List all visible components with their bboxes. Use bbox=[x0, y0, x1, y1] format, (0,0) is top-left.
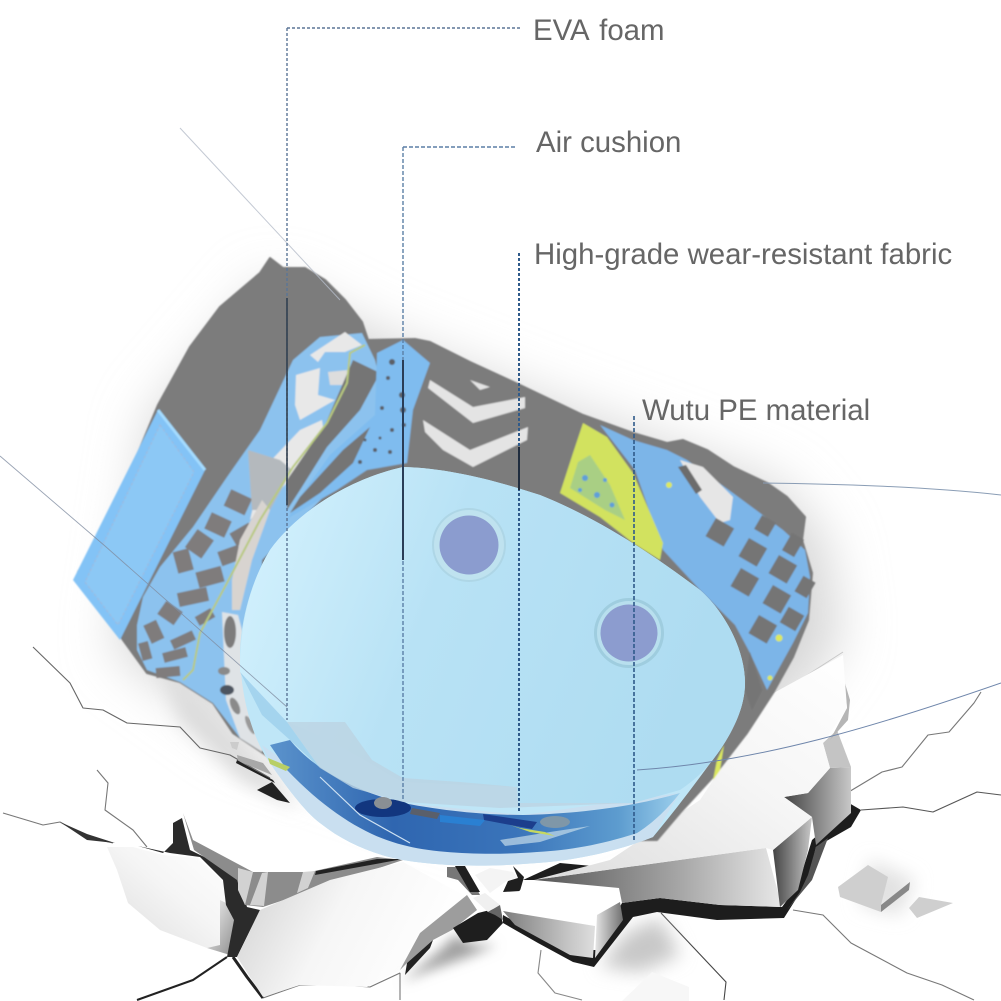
small rock chip 2 bbox=[909, 897, 953, 918]
pad outer rim bbox=[240, 467, 745, 866]
right slab top bbox=[534, 655, 847, 880]
dark inner flaps bbox=[287, 360, 380, 510]
leader line: right lower curve bbox=[637, 683, 1001, 770]
callout: air cushion: Air cushion bbox=[536, 126, 681, 159]
left slab bbox=[107, 847, 228, 948]
speckles on splash bbox=[358, 359, 406, 464]
green stitch line bbox=[183, 345, 365, 680]
scalloped trim chain bbox=[218, 612, 268, 752]
white logo patch bbox=[678, 460, 733, 523]
right slab front face bbox=[534, 848, 782, 907]
grey flap lower bbox=[290, 427, 370, 513]
velcro patch bbox=[73, 410, 205, 640]
lower white slab bbox=[503, 882, 623, 958]
soft shadow under lower slab bbox=[600, 918, 680, 972]
central slab bbox=[237, 862, 467, 997]
pad rivet upper bbox=[432, 508, 506, 582]
strap and shell base bbox=[78, 258, 812, 840]
callout: EVA foam: EVA foam bbox=[533, 14, 665, 47]
pad lower rim bbox=[262, 745, 680, 866]
bottom chip bbox=[622, 972, 689, 1001]
knot rubble bbox=[400, 866, 524, 975]
dark tapered cracks bbox=[60, 822, 115, 843]
cracked ground bbox=[3, 647, 1001, 1001]
yellow green pattern bbox=[560, 423, 663, 560]
dark blue inner band bbox=[270, 740, 680, 854]
thin cracks bbox=[3, 647, 1001, 1000]
right checker pattern bbox=[705, 515, 816, 710]
band highlights bbox=[268, 758, 590, 846]
leader line: right upper bbox=[763, 483, 1001, 495]
yellow green accents bbox=[666, 482, 782, 780]
right slab side faces bbox=[773, 817, 812, 907]
callout: Wutu PE material: Wutu PE material bbox=[642, 394, 870, 427]
protective pad bbox=[240, 467, 745, 866]
leader line: upper left thin bbox=[180, 128, 340, 300]
translucent left wedge bbox=[240, 672, 320, 768]
grey crack facets left bbox=[183, 813, 403, 907]
main dark crack left bbox=[138, 818, 260, 957]
lower black crack band bbox=[503, 803, 861, 967]
soft shadow under knot bbox=[402, 935, 497, 982]
small rock chip 1 bbox=[838, 860, 915, 915]
blue splash patch bbox=[282, 340, 430, 530]
white chevrons bbox=[423, 380, 528, 467]
background soft shadow bbox=[115, 280, 840, 830]
pad main face bbox=[240, 467, 745, 803]
leader line: left thin bbox=[0, 456, 287, 707]
left checker pattern bbox=[138, 489, 256, 678]
white swoosh graphics bbox=[232, 332, 362, 610]
translucent grey band bbox=[287, 722, 633, 808]
callout: air cushion bbox=[403, 126, 681, 800]
left blue pattern bbox=[137, 333, 385, 750]
right blue panel bbox=[600, 425, 810, 690]
knee pad strap and shell bbox=[73, 258, 816, 840]
callout: EVA foam bbox=[287, 14, 665, 720]
pad rivet lower bbox=[594, 598, 664, 668]
callout: high-grade fabric: High-grade wear-resistant fabric bbox=[534, 238, 952, 271]
